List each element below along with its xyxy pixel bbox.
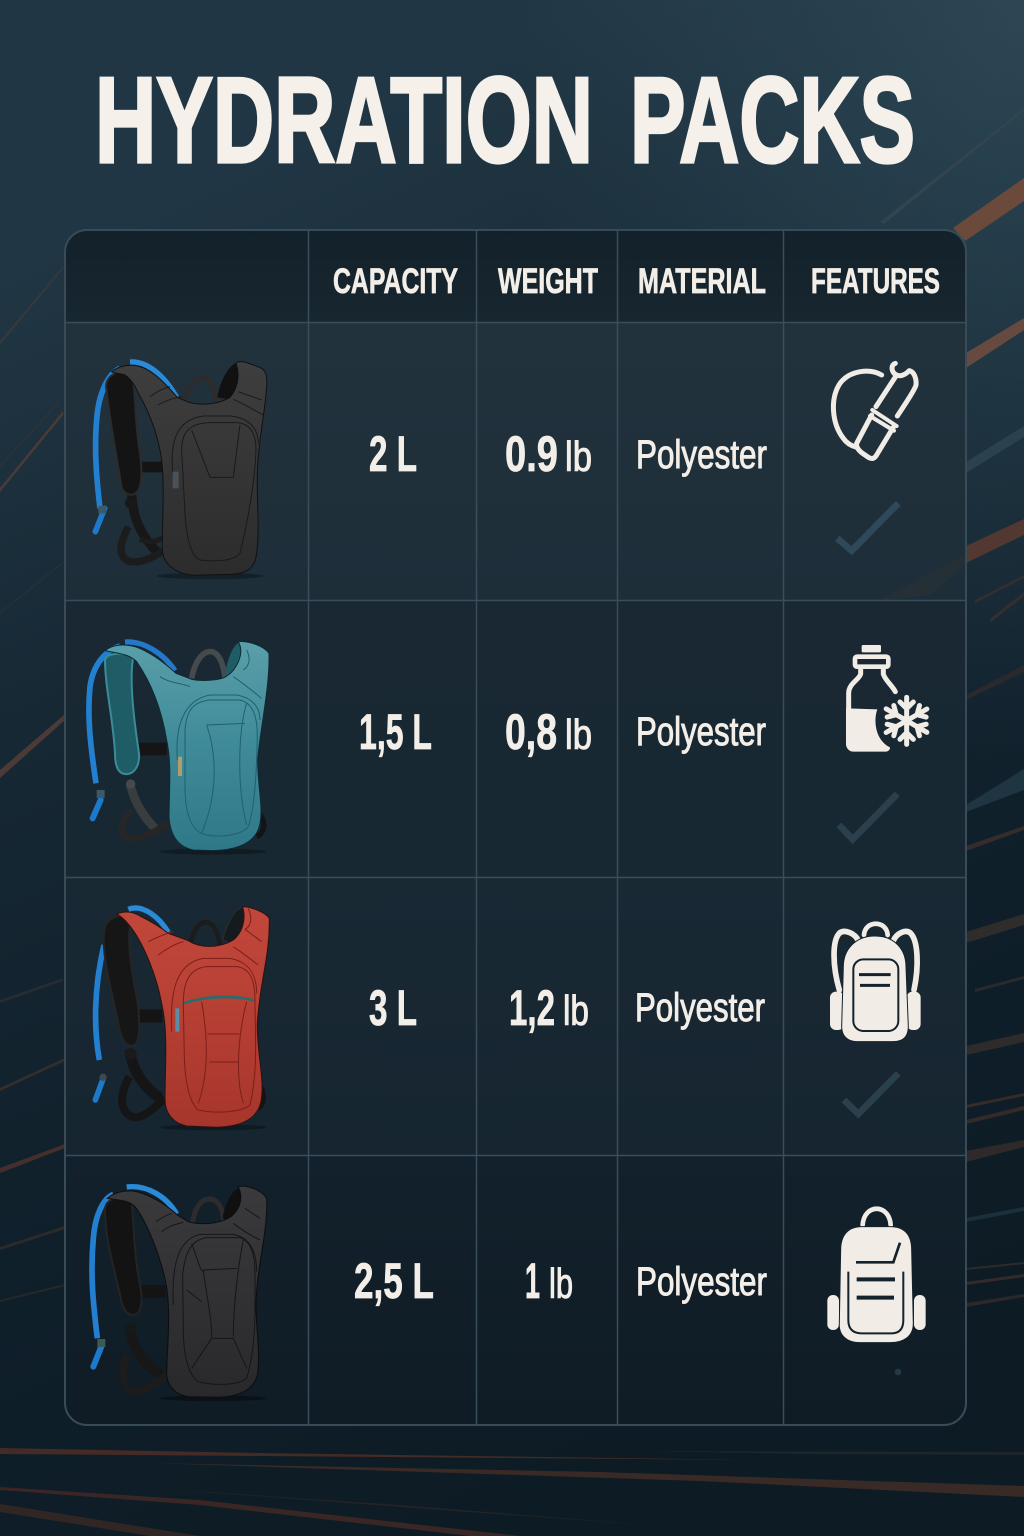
weight value, row 2: lb [565,711,592,758]
title: HYDRATION [95,52,593,188]
header row [333,262,940,301]
icon: check mark, row 1 [837,503,898,551]
material, row 3: Polyester [635,986,765,1030]
header row: MATERIAL [638,262,766,301]
icon: backpack with pocket, row 3 [830,924,921,1042]
icon: insulated bottle with snowflake, row 2 [846,645,930,752]
backpack: red, row 3 [95,907,269,1130]
weight value, row 1: 0.9 [505,426,558,482]
icon: backpack with lines, row 4 [827,1209,926,1343]
capacity value, row 2: 1,5 L [359,704,432,760]
backpack: black, row 1 [95,361,267,579]
material, row 2: Polyester [636,710,766,754]
weight value, row 3: 1,2 [509,980,555,1036]
icon: check mark, row 2 [839,794,897,839]
header row: WEIGHT [498,262,598,301]
weight value, row 1: lb [565,433,592,480]
weight value, row 4: lb [549,1260,573,1307]
header row: CAPACITY [333,262,458,301]
weight value, row 2: 0,8 [505,704,557,760]
weight value, row 4 [525,1253,573,1309]
material, row 1: Polyester [636,433,767,477]
weight value, row 3: lb [563,987,589,1034]
header row: FEATURES [811,262,940,301]
icon: check mark, row 3 [844,1073,898,1114]
backpack: charcoal, row 4 [92,1186,267,1401]
capacity value, row 4: 2,5 L [354,1253,434,1309]
capacity value, row 1: 2 L [369,426,417,482]
material, row 4: Polyester [636,1260,767,1304]
icon: hydration tool, row 1 [833,363,916,458]
panel: comparison table [65,230,966,1425]
weight value, row 4: 1 [525,1253,540,1309]
icon: faint dot, row 4 [895,1369,901,1375]
capacity value, row 3: 3 L [369,980,417,1036]
backpack: teal, row 2 [89,642,269,855]
